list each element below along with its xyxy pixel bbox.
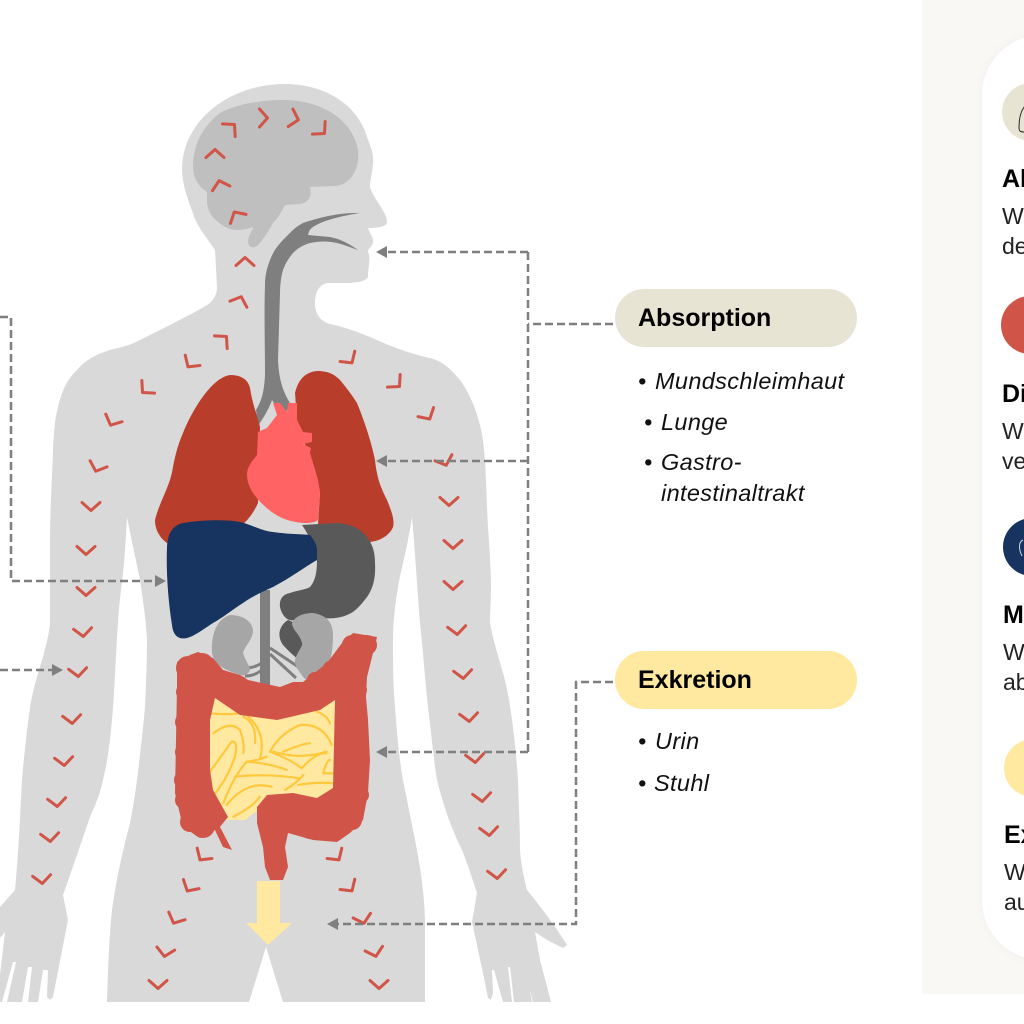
exit arrow	[246, 881, 292, 945]
right kidney	[292, 613, 333, 680]
label: Absorption	[615, 289, 857, 347]
excretion list: Stuhl	[654, 770, 709, 796]
legend card	[982, 35, 1024, 960]
absorption list	[638, 368, 845, 506]
icon: excretion	[1004, 739, 1024, 797]
brain	[193, 100, 358, 247]
text: distribution	[1002, 418, 1024, 474]
label: Exkretion: Exkretion	[638, 666, 752, 694]
absorption connector arrows	[376, 246, 613, 758]
absorption list: •	[638, 368, 647, 394]
excretion connector arrow	[327, 682, 613, 930]
absorption list: Lunge	[661, 409, 728, 435]
legend panel	[922, 0, 1024, 994]
metabolism connector arrow	[0, 664, 63, 676]
right lung	[295, 371, 394, 542]
label: Exkretion	[615, 651, 857, 709]
duodenum loop	[279, 620, 310, 668]
icon: absorption	[1002, 83, 1024, 141]
icon: distribution	[1001, 296, 1024, 354]
absorption list: Mundschleimhaut	[655, 368, 844, 394]
text: absorption	[1002, 203, 1024, 259]
absorption list: intestinaltrakt	[661, 480, 805, 506]
trachea and airways	[256, 213, 360, 426]
excretion list: •	[638, 728, 647, 754]
absorption list: •	[644, 409, 653, 435]
excretion list	[638, 728, 710, 796]
left lung	[155, 375, 260, 543]
label: Absorption: Absorption	[638, 304, 771, 332]
body silhouette	[0, 84, 567, 1002]
text: metabolism	[1003, 639, 1024, 695]
liver	[167, 520, 317, 638]
distribution connector arrow	[0, 317, 166, 587]
heart	[247, 403, 320, 523]
text: excretion	[1004, 859, 1024, 915]
excretion list: Urin	[655, 728, 700, 754]
aorta and renal vessels	[245, 590, 300, 690]
large intestine	[174, 633, 377, 880]
left kidney	[212, 615, 253, 675]
excretion list: •	[638, 770, 647, 796]
absorption list: Gastro-	[661, 449, 742, 475]
circulation chevrons	[33, 109, 506, 988]
icon: metabolism	[1003, 518, 1024, 576]
stomach	[280, 523, 375, 620]
small intestine	[208, 698, 336, 820]
absorption list: •	[644, 449, 653, 475]
